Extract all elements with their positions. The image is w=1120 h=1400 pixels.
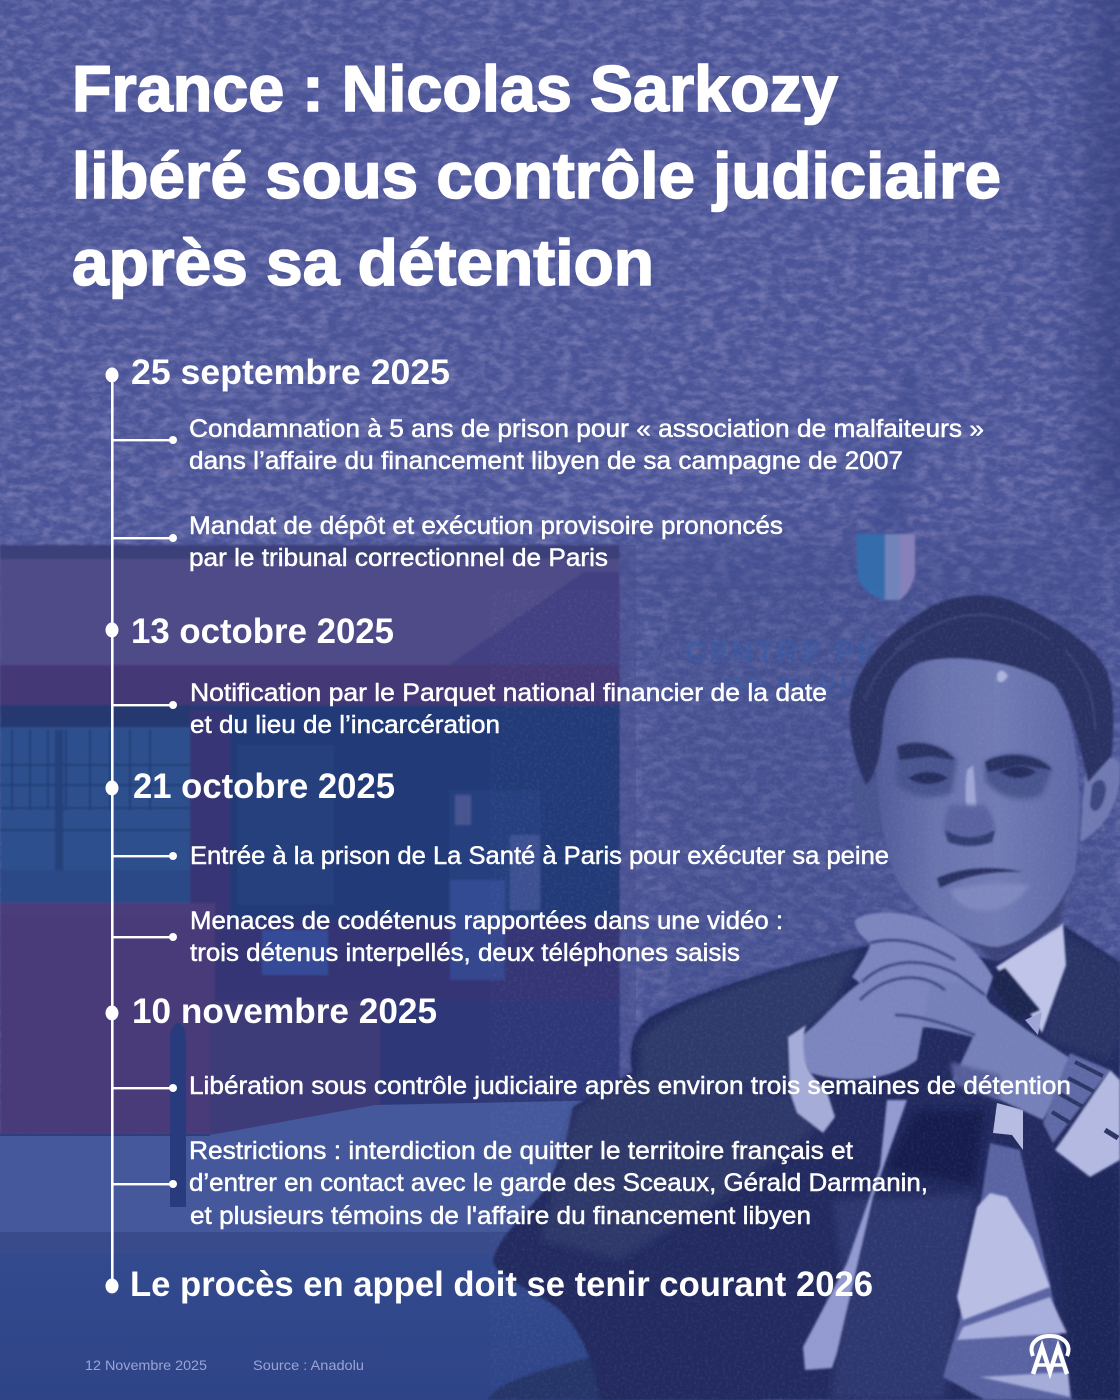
face [876, 652, 1079, 947]
bollard [170, 1023, 186, 1207]
footer: date and source: 12 Novembre 2025 [85, 1357, 207, 1373]
icon: Anadolu agency logo [1032, 1336, 1068, 1374]
title: libéré sous contrôle judiciaire [72, 139, 1001, 212]
event: 21 octobre 2025: Menaces de codétenus rapportées dans une vidéo : [190, 907, 783, 935]
event: 25 septembre 2025: 25 septembre 2025 [131, 353, 450, 392]
title [72, 52, 1001, 299]
flag and shield on the wall [856, 370, 925, 600]
wall sign: DE PARIS [725, 671, 870, 701]
event: 25 septembre 2025: Condamnation à 5 ans de prison pour « association de malfaiteurs » [189, 415, 984, 443]
event: 13 octobre 2025: Notification par le Parquet national financier de la date [190, 679, 827, 707]
event: 13 octobre 2025: et du lieu de l’incarcération [190, 711, 500, 739]
finger separations [860, 940, 985, 1035]
facial features [895, 670, 1052, 911]
footer: date and source: Source : Anadolu [253, 1357, 364, 1373]
timeline axis with nodes and branches [106, 368, 177, 1294]
left hand with fingers [795, 912, 993, 1079]
event: 10 novembre 2025: d’entrer en contact avec le garde des Sceaux, Gérald Darmanin, [189, 1169, 928, 1197]
title: France : Nicolas Sarkozy [72, 52, 838, 125]
event: 25 septembre 2025: par le tribunal correctionnel de Paris [189, 544, 608, 572]
event: 25 septembre 2025 [131, 353, 984, 572]
wall sign: CENTRE PÉNI [685, 635, 914, 669]
event: 10 novembre 2025: 10 novembre 2025 [132, 992, 437, 1031]
event: 25 septembre 2025: dans l’affaire du financement libyen de sa campagne de 2007 [189, 447, 903, 475]
event: 21 octobre 2025: 21 octobre 2025 [133, 767, 395, 806]
footer: date and source [85, 1357, 364, 1373]
event: 21 octobre 2025 [133, 767, 889, 967]
photo: man in a suit with clasped hands [488, 590, 1120, 1400]
suit jacket [493, 925, 1120, 1400]
ears [851, 758, 1120, 842]
event: 13 octobre 2025: 13 octobre 2025 [131, 612, 394, 651]
trousers [488, 1358, 760, 1400]
hair [850, 595, 1113, 785]
event: 21 octobre 2025: Entrée à la prison de La Santé à Paris pour exécuter sa peine [190, 842, 889, 870]
wrist watch and cuff [1043, 1053, 1120, 1177]
event: 10 novembre 2025 [132, 992, 1071, 1230]
event: 10 novembre 2025: et plusieurs témoins de l'affaire du financement libyen [190, 1202, 811, 1230]
event: 21 octobre 2025: trois détenus interpellés, deux téléphones saisis [190, 939, 740, 967]
sidewalk, curb and street [0, 1100, 620, 1400]
jacket shading [540, 935, 1120, 1400]
sleeve shade under right hand [950, 1062, 1000, 1100]
building facade [0, 545, 620, 1135]
hair strands [865, 615, 1095, 730]
event: 10 novembre 2025: Libération sous contrôle judiciaire après environ trois semaines de détention [189, 1072, 1071, 1100]
neck shadow [970, 892, 1067, 962]
event: 10 novembre 2025: Restrictions : interdiction de quitter le territoire français et [189, 1137, 853, 1165]
shirt, tie and lapel highlights [803, 923, 1072, 1400]
left shirt cuff [788, 1025, 835, 1133]
fine noise on the photo [490, 590, 1120, 1400]
title: après sa détention [72, 226, 654, 299]
event: 13 octobre 2025 [131, 612, 827, 739]
event: 25 septembre 2025: Mandat de dépôt et exécution provisoire prononcés [189, 512, 783, 540]
closing event: appeal trial: Le procès en appel doit se tenir courant 2026 [130, 1265, 873, 1304]
right hand and wrist [928, 996, 1070, 1121]
wall sign [685, 635, 914, 701]
timeline [106, 353, 1071, 1304]
